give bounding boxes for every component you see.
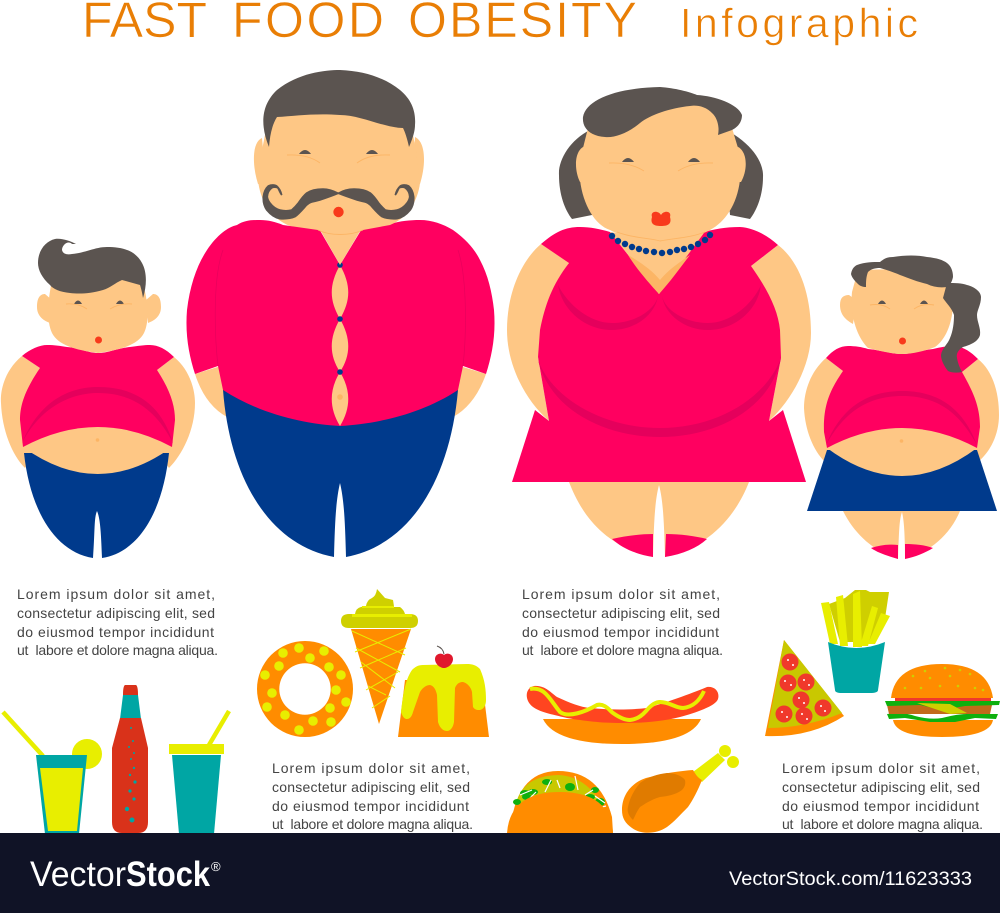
text block: fourth column — [782, 760, 983, 832]
figure: mother — [507, 87, 811, 557]
text block: second column: ut labore et dolore magna aliqua. — [272, 816, 473, 832]
icon: pizza slice — [765, 640, 844, 736]
icon: taco — [507, 771, 613, 833]
icon: ice cream cone — [341, 589, 418, 724]
icon: chicken leg — [622, 745, 739, 833]
icon: soda bottle — [112, 685, 148, 833]
icon: hot dog — [527, 686, 718, 744]
icon: donut — [257, 641, 353, 737]
text block: third column: do eiusmod tempor incididunt — [522, 624, 719, 640]
figure: father — [186, 70, 495, 557]
text block: first column: ut labore et dolore magna aliqua. — [17, 642, 218, 658]
icon: french fries — [821, 590, 890, 693]
text block: first column — [17, 586, 218, 658]
icon: soda cup — [169, 711, 229, 834]
text block: third column: consectetur adipiscing elit, sed — [522, 605, 720, 621]
text block: fourth column: Lorem ipsum dolor sit amet, — [782, 760, 980, 776]
title: Infographic — [680, 0, 918, 46]
text block: first column: consectetur adipiscing elit, sed — [17, 605, 215, 621]
text block: third column — [522, 586, 723, 658]
footer bar — [0, 833, 1000, 913]
footer: image URL: VectorStock.com/11623333 — [729, 869, 972, 890]
icon: lemonade glass — [3, 712, 102, 834]
figure: boy — [1, 239, 195, 558]
footer: VectorStock logo: ® — [211, 859, 221, 874]
text block: second column: Lorem ipsum dolor sit amet, — [272, 760, 470, 776]
text block: third column: ut labore et dolore magna aliqua. — [522, 642, 723, 658]
text block: second column: consectetur adipiscing elit, sed — [272, 779, 470, 795]
footer: VectorStock logo: Stock — [126, 855, 210, 894]
text block: second column — [272, 760, 473, 832]
text block: fourth column: do eiusmod tempor incididunt — [782, 798, 979, 814]
text block: fourth column: consectetur adipiscing elit, sed — [782, 779, 980, 795]
footer: VectorStock logo: Vector — [30, 855, 126, 894]
text block: fourth column: ut labore et dolore magna aliqua. — [782, 816, 983, 832]
text block: first column: Lorem ipsum dolor sit amet, — [17, 586, 215, 602]
footer: VectorStock logo — [30, 855, 221, 894]
text block: second column: do eiusmod tempor incididunt — [272, 798, 469, 814]
text block: third column: Lorem ipsum dolor sit amet, — [522, 586, 720, 602]
icon: pudding with cherry — [398, 646, 489, 737]
title — [82, 0, 918, 48]
icon: burger — [885, 664, 1000, 737]
figure: girl — [804, 256, 999, 559]
text block: first column: do eiusmod tempor incididunt — [17, 624, 214, 640]
